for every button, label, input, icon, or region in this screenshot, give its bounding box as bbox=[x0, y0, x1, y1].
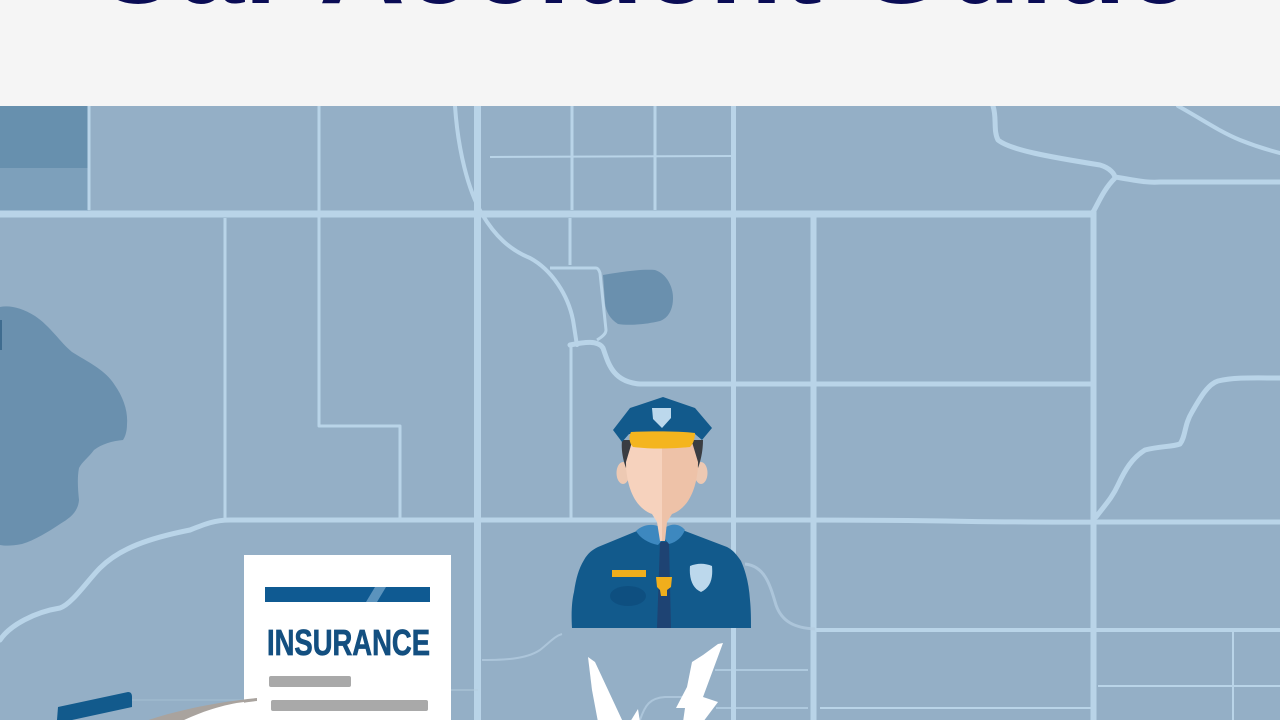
officer torso bbox=[572, 531, 751, 628]
whistle bbox=[656, 577, 672, 596]
document text line bbox=[269, 676, 351, 687]
cap bbox=[613, 397, 712, 442]
chest badge bbox=[690, 564, 712, 592]
small dark mark on lake bbox=[0, 320, 2, 350]
hair bbox=[622, 440, 703, 468]
pocket shadow bbox=[610, 586, 646, 606]
cap band bbox=[630, 431, 695, 448]
chest bar bbox=[612, 570, 646, 577]
document heading: INSURANCE bbox=[267, 622, 430, 663]
ears bbox=[616, 462, 708, 484]
side streets bbox=[89, 106, 1280, 720]
officer figure bbox=[572, 397, 751, 628]
map block: dark corner bbox=[0, 106, 88, 211]
pond bbox=[603, 270, 673, 325]
document text line bbox=[271, 700, 428, 711]
faint streets bbox=[130, 564, 815, 720]
crash burst bbox=[588, 643, 723, 720]
collar bbox=[636, 525, 685, 545]
insurance document bbox=[244, 555, 451, 720]
face bbox=[626, 442, 698, 541]
lake bbox=[0, 306, 127, 546]
hand holding document bbox=[143, 698, 257, 720]
document header bar bbox=[265, 587, 430, 602]
tie bbox=[657, 542, 671, 628]
pen bbox=[57, 692, 132, 720]
cap badge bbox=[652, 408, 671, 428]
